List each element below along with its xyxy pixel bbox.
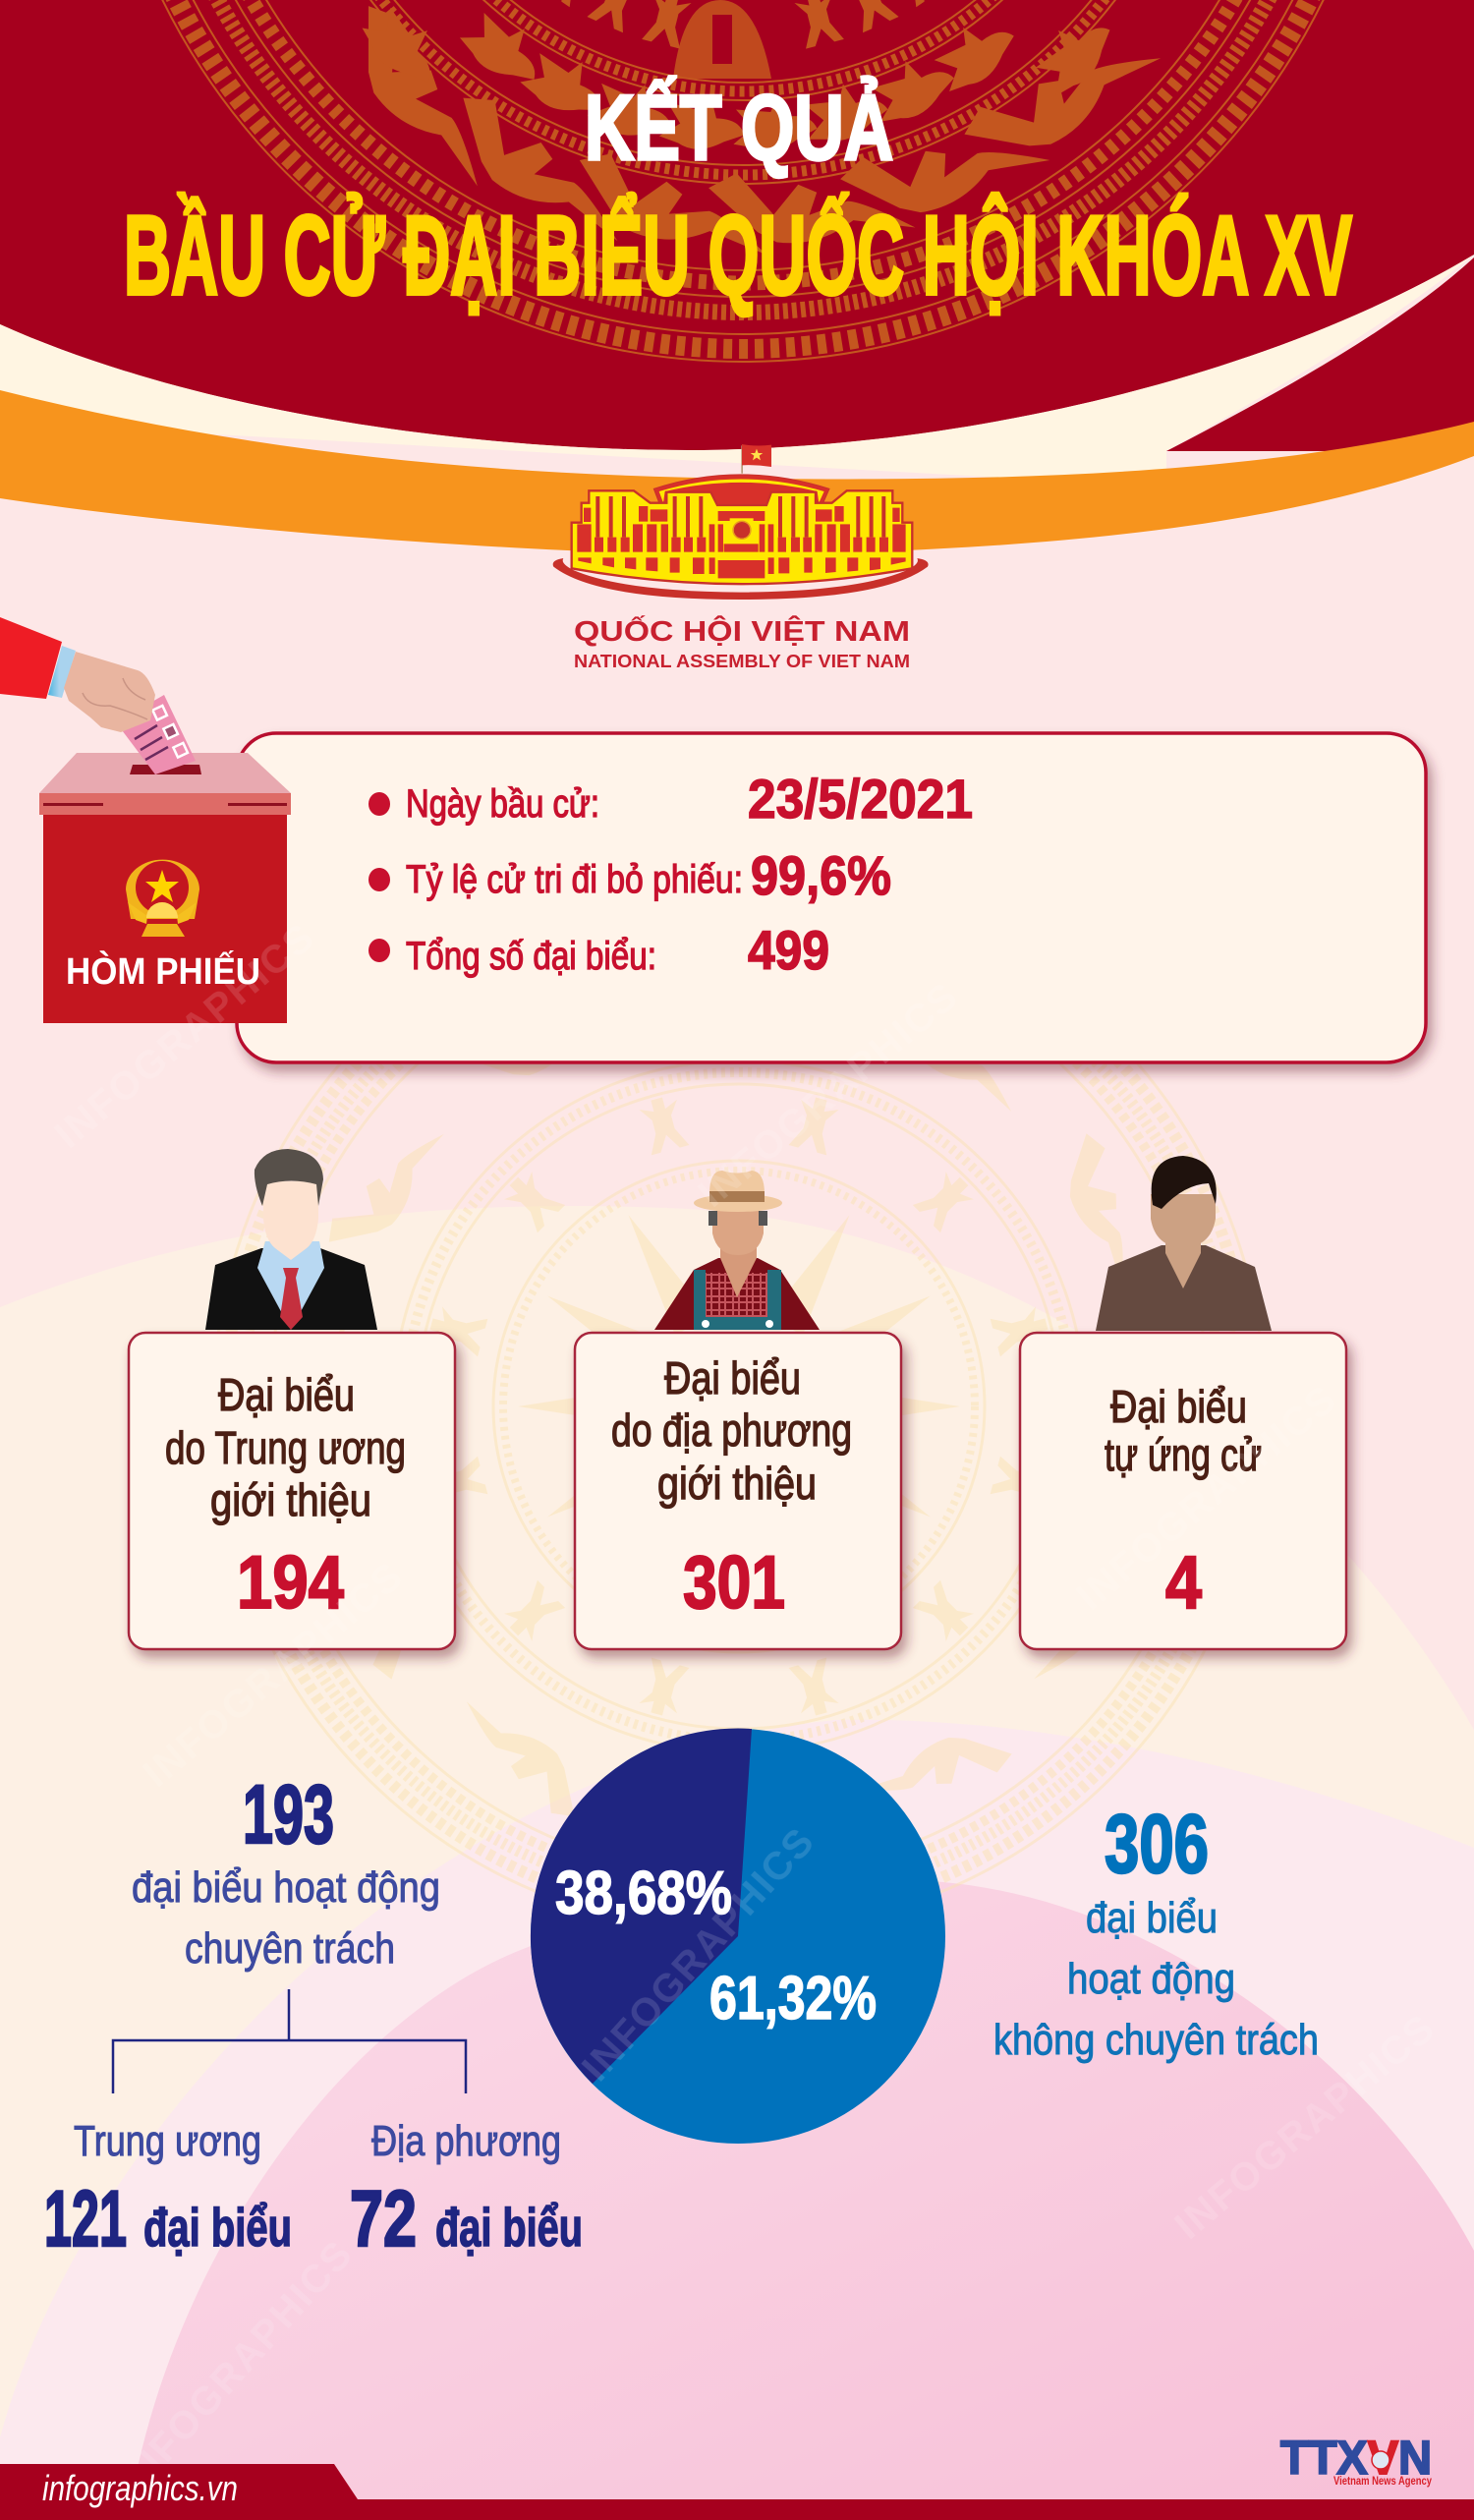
central branch xyxy=(44,2117,292,2263)
row: turnout xyxy=(368,844,891,906)
red swoosh tip xyxy=(1166,258,1474,451)
description xyxy=(132,1863,440,1973)
card text: Đại biểu xyxy=(218,1369,355,1420)
local branch: Địa phương xyxy=(371,2117,561,2165)
facade xyxy=(572,490,912,584)
card text: giới thiệu xyxy=(657,1458,817,1509)
description xyxy=(993,1894,1319,2064)
central branch: 121 xyxy=(44,2175,127,2263)
card: central delegates xyxy=(129,1333,455,1649)
card: local delegates xyxy=(575,1333,901,1649)
part-time delegates xyxy=(993,1798,1319,2064)
watermarks: INFOGRAPHICS xyxy=(112,2232,362,2502)
number 193: 193 xyxy=(243,1768,334,1861)
ballot paper xyxy=(116,695,196,774)
title xyxy=(124,76,1352,318)
emblem on building xyxy=(730,518,754,543)
description: đại biểu hoạt động xyxy=(132,1863,440,1912)
card number: 301 xyxy=(683,1541,785,1625)
row: total delegates xyxy=(368,919,829,981)
card text: Đại biểu xyxy=(664,1352,801,1403)
row: total delegates: Tổng số đại biểu: xyxy=(406,935,656,978)
background drum watermark xyxy=(213,881,1265,1932)
base ellipse xyxy=(553,558,929,600)
website: infographics.vn xyxy=(42,2468,238,2508)
icon: hand with ballot xyxy=(0,617,196,774)
row: total delegates: 499 xyxy=(748,919,829,981)
bronze drum pattern xyxy=(96,0,1389,362)
footer xyxy=(0,2433,1474,2520)
icon: building xyxy=(553,475,929,600)
central branch: đại biểu xyxy=(143,2197,292,2258)
full-time delegates xyxy=(44,1768,583,2263)
person: suited man xyxy=(205,1149,377,1330)
logo: TTXVN: TTXVN xyxy=(1280,2433,1432,2485)
card text xyxy=(165,1369,406,1525)
ballot box label: HÒM PHIẾU xyxy=(66,949,260,993)
central branch: Trung ương xyxy=(74,2117,261,2165)
card: self-nominated delegates xyxy=(1020,1333,1346,1649)
card text: giới thiệu xyxy=(210,1474,371,1525)
watermarks: INFOGRAPHICS xyxy=(136,1554,412,1796)
card text: do Trung ương xyxy=(165,1422,406,1473)
number 306: 306 xyxy=(1105,1798,1209,1890)
watermarks xyxy=(47,915,1444,2502)
pie label dark: 38,68% xyxy=(555,1860,732,1927)
window blocks xyxy=(577,506,906,552)
national assembly logo xyxy=(553,444,929,671)
card text: do địa phương xyxy=(611,1404,852,1456)
pie label blue: 61,32% xyxy=(709,1965,877,2033)
person: farmer xyxy=(654,1171,820,1330)
logo subtitle: NATIONAL ASSEMBLY OF VIET NAM xyxy=(574,652,910,671)
logo text: QUỐC HỘI VIỆT NAM xyxy=(574,614,910,648)
title line 1: KẾT QUẢ xyxy=(585,76,893,179)
icon: ballot box xyxy=(39,753,291,1023)
orange band xyxy=(0,390,1474,555)
logo: TTXVN: Vietnam News Agency xyxy=(1333,2476,1432,2488)
local branch: đại biểu xyxy=(435,2197,583,2258)
watermarks: INFOGRAPHICS xyxy=(574,1819,823,2090)
dome xyxy=(653,475,829,505)
row: election date: Ngày bầu cử: xyxy=(406,782,599,826)
panel: election summary xyxy=(237,733,1426,1062)
person: self-nominated man xyxy=(1096,1156,1272,1331)
watermarks: INFOGRAPHICS xyxy=(691,974,967,1216)
row: turnout: Tỷ lệ cử tri đi bỏ phiếu: xyxy=(406,858,743,901)
description: đại biểu xyxy=(1086,1894,1218,1942)
local branch: 72 xyxy=(350,2175,417,2263)
pie chart xyxy=(531,1729,945,2144)
local branch xyxy=(350,2117,583,2263)
cream swoosh xyxy=(0,255,1474,487)
columns xyxy=(597,496,883,538)
watermarks: INFOGRAPHICS xyxy=(1069,1377,1345,1619)
icon: national emblem xyxy=(126,860,199,937)
description: không chuyên trách xyxy=(993,2016,1319,2064)
watermarks: INFOGRAPHICS xyxy=(1167,2006,1444,2248)
description: chuyên trách xyxy=(185,1924,395,1973)
row: election date: 23/5/2021 xyxy=(748,768,973,830)
card number: 194 xyxy=(237,1541,344,1625)
card text: tự ứng cử xyxy=(1105,1429,1262,1480)
tree connector xyxy=(113,1989,466,2093)
card text: Đại biểu xyxy=(1110,1381,1247,1432)
card number: 4 xyxy=(1165,1541,1202,1625)
row: election date xyxy=(368,768,973,830)
red header with drum xyxy=(0,0,1474,450)
row: turnout: 99,6% xyxy=(751,844,891,906)
icon: flag xyxy=(741,444,771,474)
card text xyxy=(611,1352,852,1509)
card text xyxy=(1105,1381,1262,1480)
description: hoạt động xyxy=(1067,1955,1235,2003)
watermarks: INFOGRAPHICS xyxy=(47,915,323,1157)
